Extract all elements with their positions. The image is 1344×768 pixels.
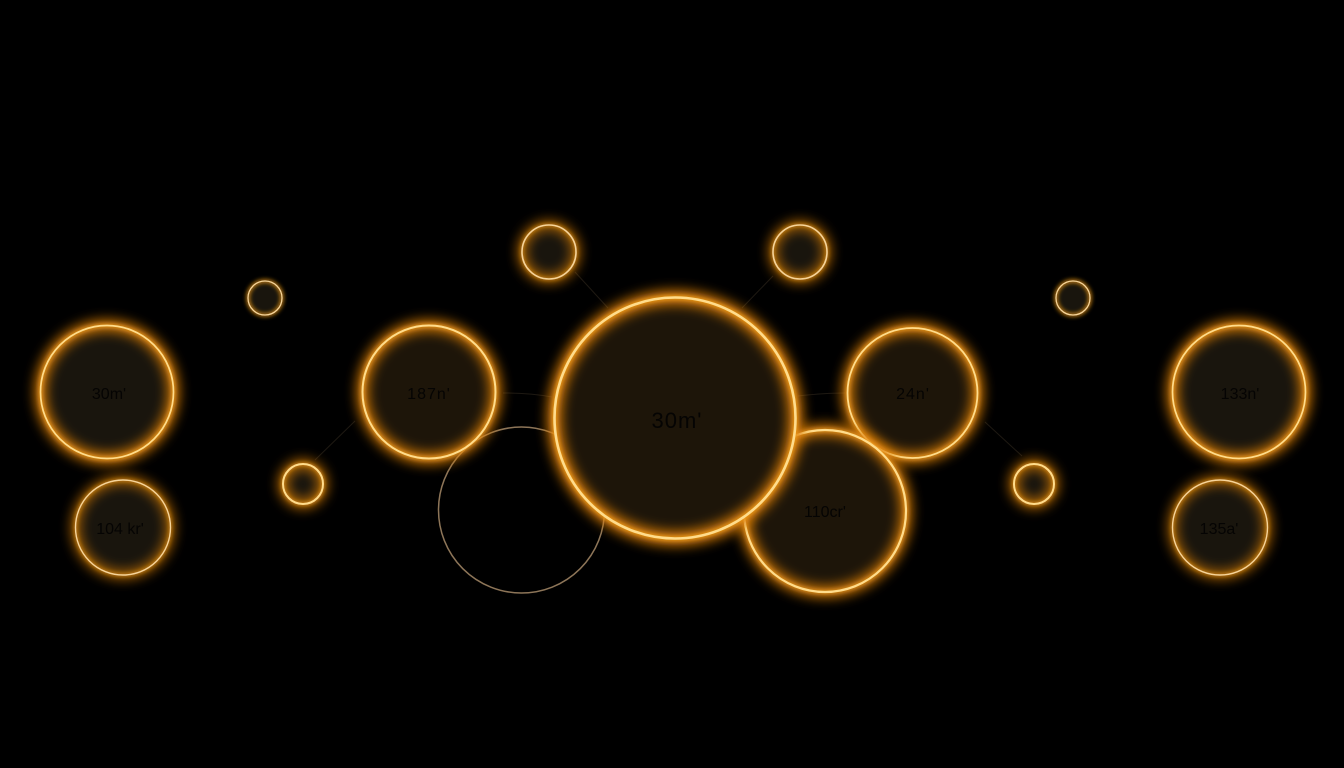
- circle: 133 n: [1172, 326, 1306, 458]
- label: 24 n: 24n': [896, 386, 930, 403]
- circle: 110 cr: [744, 430, 906, 592]
- label: 135 a: 135a': [1200, 521, 1238, 538]
- circle: 135 a: [1172, 480, 1268, 575]
- circle: left 30 m: [40, 326, 174, 458]
- small circle: lower left: [283, 464, 323, 504]
- connector lines: [315, 272, 1022, 460]
- circle: 187 n: [362, 326, 496, 458]
- label: centre 30 m: 30m': [652, 408, 702, 433]
- label: 110 cr: 110cr': [804, 504, 846, 521]
- label: 133 n: 133n': [1221, 386, 1259, 403]
- label: 104 k: 104 kr': [96, 521, 144, 538]
- circle: centre 30 m: [554, 298, 796, 538]
- small circle: far left: [248, 281, 282, 315]
- outline circle: [438, 427, 604, 593]
- small circle: top left: [522, 225, 576, 279]
- label: 187 n: 187n': [407, 386, 451, 403]
- small circle: top right: [773, 225, 827, 279]
- circle: 104 k: [76, 480, 170, 575]
- small circle: far right: [1056, 281, 1090, 315]
- small circle: lower right: [1014, 464, 1054, 504]
- label: left 30 m: 30m': [92, 386, 126, 403]
- circle: 24 n: [848, 328, 978, 458]
